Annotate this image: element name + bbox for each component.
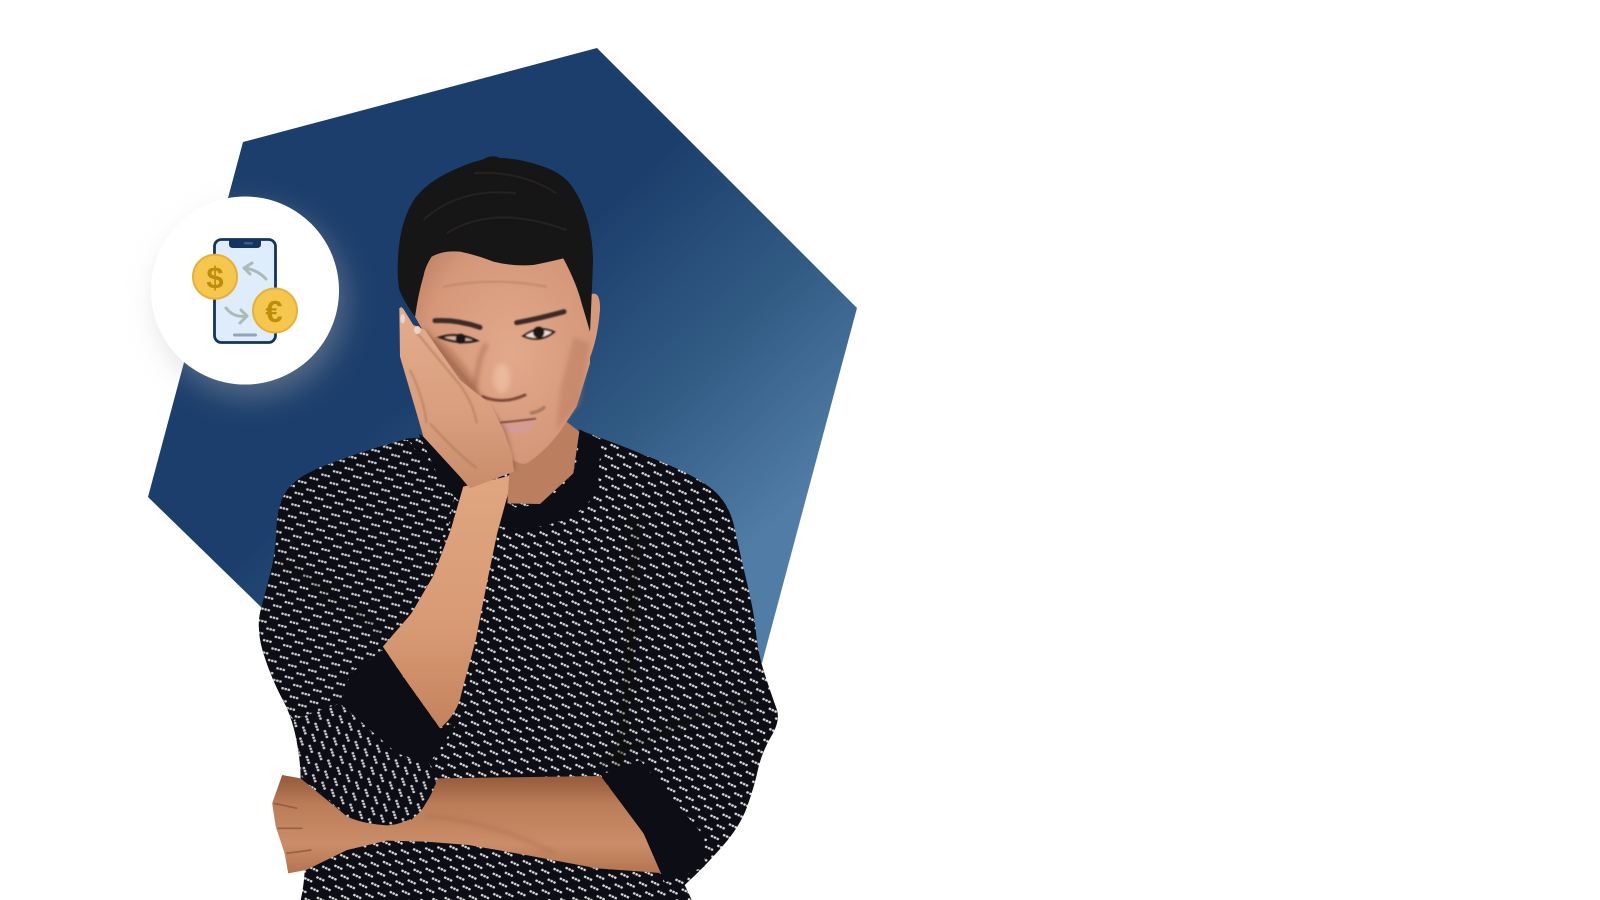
raised hand — [399, 307, 514, 488]
icon badge: mobile currency exchange — [151, 196, 339, 384]
face shading — [557, 337, 590, 430]
icon: euro coin: € — [265, 294, 283, 329]
shadow under raised hand — [423, 330, 513, 470]
icon: dollar coin — [193, 255, 237, 299]
sweater body — [259, 430, 778, 900]
person: frustrated man — [259, 156, 778, 900]
face — [415, 240, 590, 464]
left sleeve cuff — [340, 650, 458, 763]
icon: phone — [214, 240, 276, 342]
right sleeve cuff — [601, 760, 704, 883]
lower left sleeve — [294, 703, 438, 825]
icon: exchange arrows — [226, 263, 266, 323]
head — [398, 156, 600, 504]
badge circle — [151, 196, 339, 384]
hair — [398, 156, 593, 332]
icon: euro coin — [253, 288, 297, 332]
mouth — [500, 419, 536, 433]
icon: dollar coin: $ — [206, 260, 224, 295]
sweater fold shadows — [279, 520, 758, 773]
upper left sleeve — [259, 440, 454, 720]
hexagon background — [148, 48, 857, 663]
sweater and arms — [259, 429, 778, 900]
lower forearm and hand — [272, 775, 665, 873]
eyes — [440, 327, 554, 344]
nose — [475, 343, 545, 413]
eyebrows — [435, 312, 564, 327]
ear — [587, 294, 600, 365]
finger creases — [274, 803, 311, 853]
neck — [503, 417, 579, 504]
raised forearm — [383, 475, 513, 728]
collar — [419, 429, 601, 529]
